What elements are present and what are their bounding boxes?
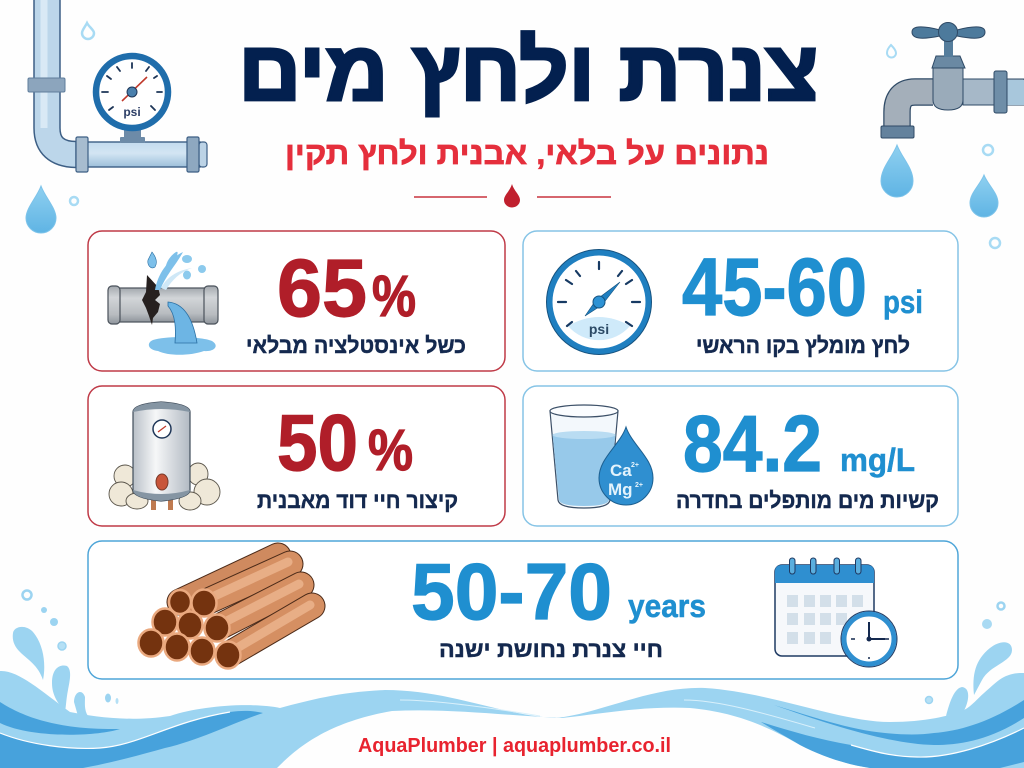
label: water hardness: קשיות מים מותפלים בחדרה <box>676 488 939 513</box>
icon: burst pipe <box>108 252 218 355</box>
label: recommended pressure: לחץ מומלץ בקו הראשי <box>696 333 910 358</box>
icon: pressure gauge: psi <box>589 321 609 337</box>
icon: water drops right <box>881 45 1000 248</box>
icon: pressure gauge <box>546 250 652 354</box>
stat: 65%: % <box>372 264 416 329</box>
panel: water hardness <box>523 386 958 526</box>
stat: 65% <box>277 243 416 334</box>
label: old copper life: חיי צנרת נחושת ישנה <box>439 637 663 662</box>
stat: 84.2 mg/L <box>683 399 915 488</box>
splash right <box>973 642 1012 695</box>
footer brand: AquaPlumber | aquaplumber.co.il <box>358 735 671 757</box>
mineral labels: Mg <box>608 480 633 499</box>
mineral labels: 2+ <box>631 462 639 469</box>
divider with drop <box>414 184 611 208</box>
icon: pipe with pressure gauge <box>28 0 207 172</box>
stat: 50-70 years: 50-70 <box>411 547 612 636</box>
label: heater scale: קיצור חיי דוד מאבנית <box>257 488 458 513</box>
stat: 84.2 mg/L: 84.2 <box>683 399 822 488</box>
stat: 84.2 mg/L: mg/L <box>840 442 915 478</box>
stat: 45-60 psi: 45-60 <box>682 242 867 333</box>
splash left <box>13 627 44 680</box>
panel: heater scale <box>88 386 505 526</box>
label: installation failure: כשל אינסטלציה מבלאי <box>246 333 466 358</box>
icon: water drop large left <box>26 186 56 233</box>
panel: recommended pressure <box>523 231 958 371</box>
icon: calendar and clock <box>775 558 897 667</box>
mineral labels: Ca <box>610 461 632 480</box>
gauge dial <box>96 56 168 128</box>
title: צנרת ולחץ מים <box>238 24 818 118</box>
icon: faucet <box>881 22 1024 138</box>
panel: copper pipe lifespan <box>88 541 958 679</box>
stat: 50-70 years: years <box>628 588 706 624</box>
stat: 50%: % <box>368 418 413 483</box>
bubbles <box>22 590 32 600</box>
icon: copper pipes stack <box>138 556 312 668</box>
mineral labels: 2+ <box>635 482 643 489</box>
icon: small drop and ring left <box>70 23 94 205</box>
stat: 65%: 65 <box>277 243 367 334</box>
water waves footer background <box>0 590 1024 768</box>
mineral labels <box>608 461 643 499</box>
panel: installation failure <box>88 231 505 371</box>
subtitle: נתונים על בלאי, אבנית ולחץ תקין <box>285 136 769 171</box>
stat: 45-60 psi: psi <box>883 284 923 320</box>
gauge dial: psi <box>123 105 141 119</box>
stat: 50-70 years <box>411 547 706 636</box>
stat: 50% <box>277 398 413 487</box>
stat: 50%: 50 <box>277 398 358 487</box>
icon: glass of water with mineral drop <box>550 405 653 508</box>
icon: water heater with scale rocks <box>109 402 220 510</box>
